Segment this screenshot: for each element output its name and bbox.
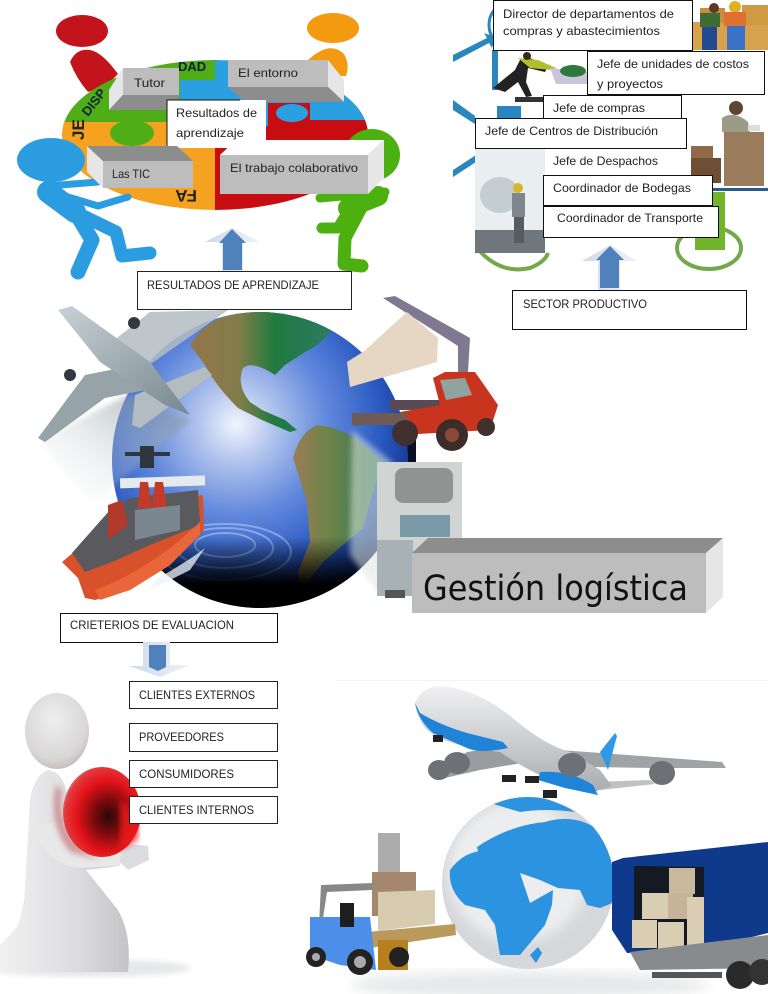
photo: woman pushing cart bbox=[493, 52, 588, 102]
arrow: up to jobs bbox=[582, 245, 637, 292]
globe bbox=[112, 311, 416, 608]
box: Jefe de Centros bbox=[476, 118, 686, 148]
box: Coordinador de Bodegas bbox=[544, 176, 712, 206]
panel: people holding puzzle bbox=[17, 13, 400, 272]
continent: North America bbox=[190, 311, 332, 432]
box: Consumidores bbox=[130, 760, 278, 788]
box: Jefe de Despachos: Jefe de Despachos bbox=[553, 154, 658, 168]
photo: man with boxes on trolley bbox=[686, 101, 768, 192]
arrow: up to puzzle bbox=[205, 228, 260, 274]
box: Director: compras y abastecimientos bbox=[503, 24, 660, 38]
box: Jefe de unidades: y proyectos bbox=[597, 77, 663, 91]
box: Jefe de compras: Jefe de compras bbox=[553, 101, 645, 115]
icon: world globe bbox=[442, 795, 620, 969]
title: Gestión logística: Gestión logística bbox=[423, 569, 688, 609]
icon: blue figure bbox=[17, 138, 150, 272]
box: Director bbox=[494, 0, 692, 50]
panel: transport illustration bbox=[306, 680, 768, 994]
photo: workers with boxes bbox=[693, 1, 768, 50]
icon: grey airplane bbox=[38, 306, 228, 505]
box: Coordinador de Transporte bbox=[544, 206, 718, 238]
puzzle disc: JE bbox=[69, 119, 88, 140]
box: Tutor: Tutor bbox=[134, 76, 165, 90]
box: El entorno: El entorno bbox=[238, 66, 298, 80]
box: Sector productivo bbox=[512, 290, 746, 330]
box: Clientes internos bbox=[130, 796, 278, 824]
box: Resultados de aprendizaje heading: RESULTADOS DE APRENDIZAJE bbox=[147, 278, 319, 292]
box: Jefe de Despachos bbox=[545, 149, 686, 175]
icon: container crane truck bbox=[347, 296, 498, 451]
icon: truck front bbox=[377, 462, 462, 598]
icon: airplane bbox=[415, 686, 726, 798]
globe night shadow bbox=[112, 312, 408, 608]
box: Jefe de unidades bbox=[588, 52, 764, 94]
title: Gestión logística bbox=[412, 538, 723, 613]
icon: cargo ship bbox=[62, 446, 205, 600]
icon: white figure with red ball bbox=[0, 693, 190, 977]
box: Las TIC bbox=[87, 146, 193, 188]
box: Clientes externos bbox=[130, 682, 278, 708]
box: Tutor bbox=[109, 68, 179, 110]
continent: South America bbox=[293, 425, 383, 592]
box: Resultados de aprendizaje: aprendizaje bbox=[176, 126, 244, 140]
box: Criterios de evaluacion: CRIETERIOS DE EVALUACION bbox=[70, 618, 234, 632]
icon: green figure bbox=[320, 129, 400, 266]
box: Resultados de aprendizaje heading bbox=[138, 272, 352, 310]
panel: central logistics globe bbox=[38, 296, 498, 608]
box: Criterios de evaluacion bbox=[60, 614, 278, 642]
box: Clientes internos: CLIENTES INTERNOS bbox=[139, 803, 254, 817]
box: Resultados de aprendizaje: Resultados de bbox=[176, 106, 257, 120]
box: Coordinador de Bodegas: Coordinador de Bodegas bbox=[553, 181, 691, 195]
icon: container truck bbox=[612, 842, 768, 989]
box: Coordinador de Transporte: Coordinador de Transporte bbox=[557, 211, 703, 225]
puzzle disc: FA bbox=[175, 186, 197, 205]
puzzle disc: DISP bbox=[79, 85, 109, 119]
box: Proveedores bbox=[130, 724, 278, 752]
box: Jefe de compras bbox=[544, 96, 682, 120]
box: Sector productivo: SECTOR PRODUCTIVO bbox=[523, 297, 647, 311]
panel: sector productivo background bbox=[453, 1, 768, 269]
box: Resultados de aprendizaje bbox=[167, 100, 266, 148]
box: Clientes externos: CLIENTES EXTERNOS bbox=[139, 688, 255, 702]
box: El trabajo colaborativo: El trabajo colaborativo bbox=[230, 161, 358, 175]
photo: inspector in plant bbox=[475, 148, 545, 253]
arrow: down to clients bbox=[129, 642, 190, 677]
icon: background arrows bbox=[453, 33, 521, 177]
icon: forklift with box bbox=[306, 833, 456, 975]
box: Proveedores: PROVEEDORES bbox=[139, 730, 224, 744]
truck light beam bbox=[350, 430, 392, 595]
box: Jefe de unidades: Jefe de unidades de costos bbox=[597, 57, 749, 71]
icon: orange figure bbox=[307, 13, 359, 76]
box: El trabajo colaborativo bbox=[220, 140, 384, 194]
icon: green rings bbox=[477, 227, 741, 269]
box: Las TIC: Las TIC bbox=[112, 167, 150, 181]
box: Consumidores: CONSUMIDORES bbox=[139, 767, 234, 781]
puzzle letters: DAD bbox=[178, 59, 206, 74]
box: Jefe de Centros: Jefe de Centros de Distribución bbox=[485, 124, 658, 138]
puzzle disc bbox=[60, 58, 370, 212]
box: Director: Director de departamentos de bbox=[503, 7, 674, 21]
box: El entorno bbox=[228, 60, 344, 102]
ocean ripples bbox=[159, 524, 291, 580]
icon: red figure bbox=[56, 15, 118, 92]
